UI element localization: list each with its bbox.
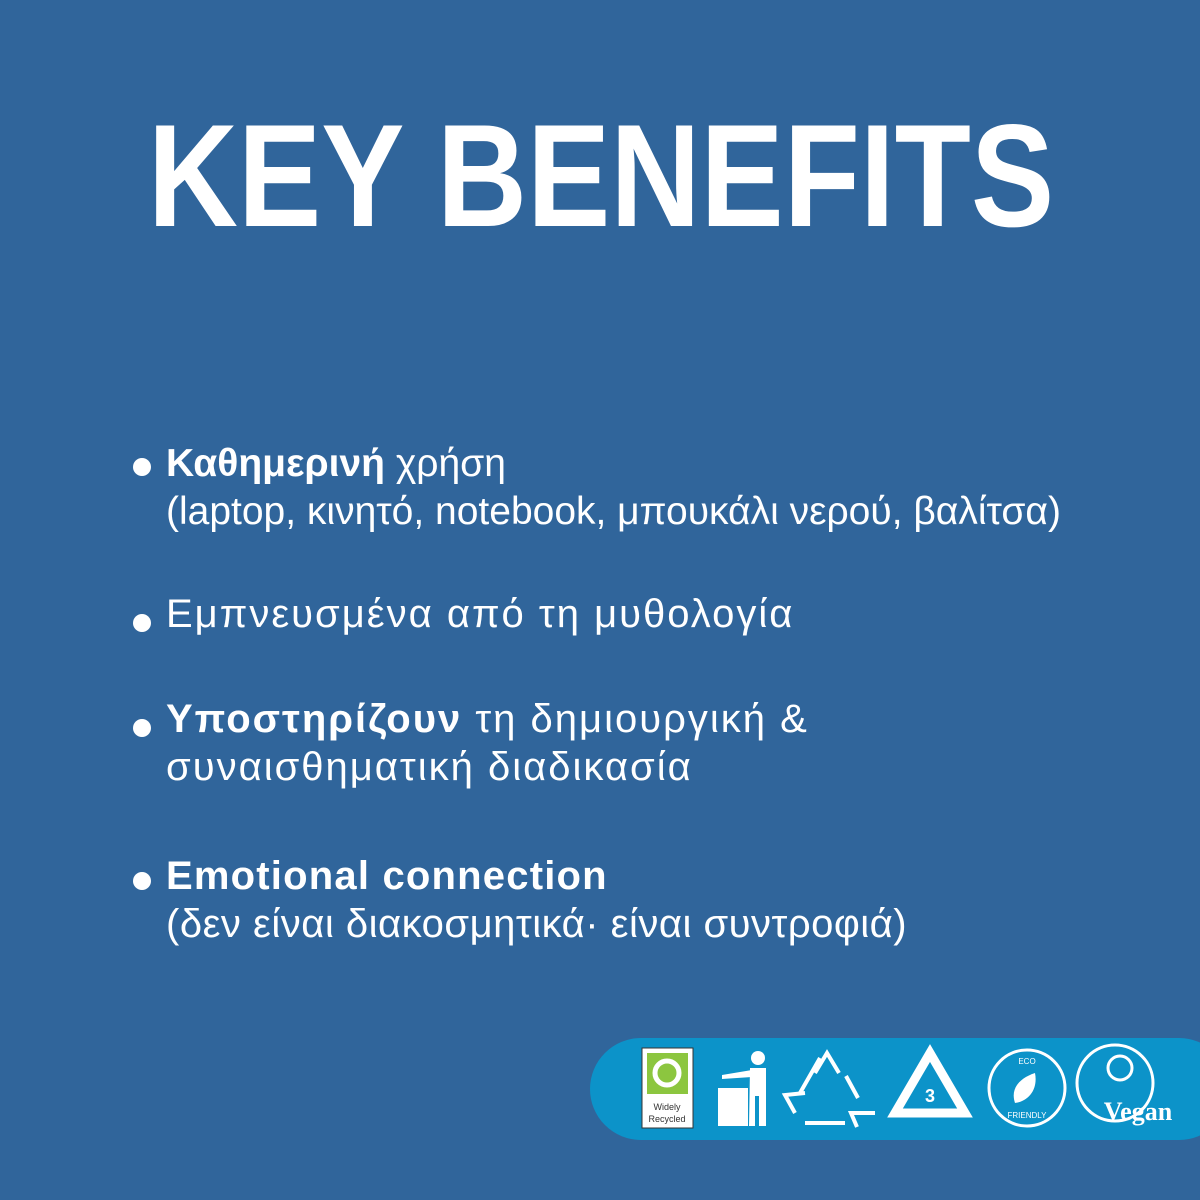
bullet 3 (133, 697, 809, 789)
icon: recycle 3: 3 (925, 1086, 935, 1106)
bullet 3: συναισθηματική διαδικασία (166, 745, 693, 789)
icon: widely recycled: Widely (653, 1102, 681, 1112)
bullet 2: Εμπνευσμένα από τη μυθολογία (166, 592, 794, 636)
bullet 4: Emotional connection (166, 854, 608, 898)
title: KEY BENEFITS (148, 94, 1054, 257)
icon: recycle 3 (895, 1053, 965, 1113)
icon: tidy man (718, 1051, 766, 1126)
icon bar (590, 1038, 1200, 1140)
bullet 4: (δεν είναι διακοσμητικά· είναι συντροφιά) (166, 902, 907, 946)
icon: eco friendly: FRIENDLY (1008, 1111, 1047, 1120)
bullet 1: (laptop, κινητό, notebook, μπουκάλι νερού, βαλίτσα) (166, 490, 1061, 533)
icon: vegan (1077, 1045, 1173, 1126)
icon: widely recycled: Recycled (648, 1114, 686, 1124)
icon: eco friendly: ECO (1018, 1057, 1036, 1066)
bullet 4 (133, 854, 907, 946)
icon: widely recycled (642, 1048, 693, 1128)
icon: eco friendly (989, 1050, 1065, 1126)
icon: vegan: Vegan (1104, 1097, 1173, 1126)
icon: recycle (785, 1053, 875, 1127)
bullet 1: Καθημερινή χρήση (166, 442, 506, 485)
bullet 3: Υποστηρίζουν τη δημιουργική & (166, 697, 809, 741)
bullet 1 (133, 442, 1061, 533)
